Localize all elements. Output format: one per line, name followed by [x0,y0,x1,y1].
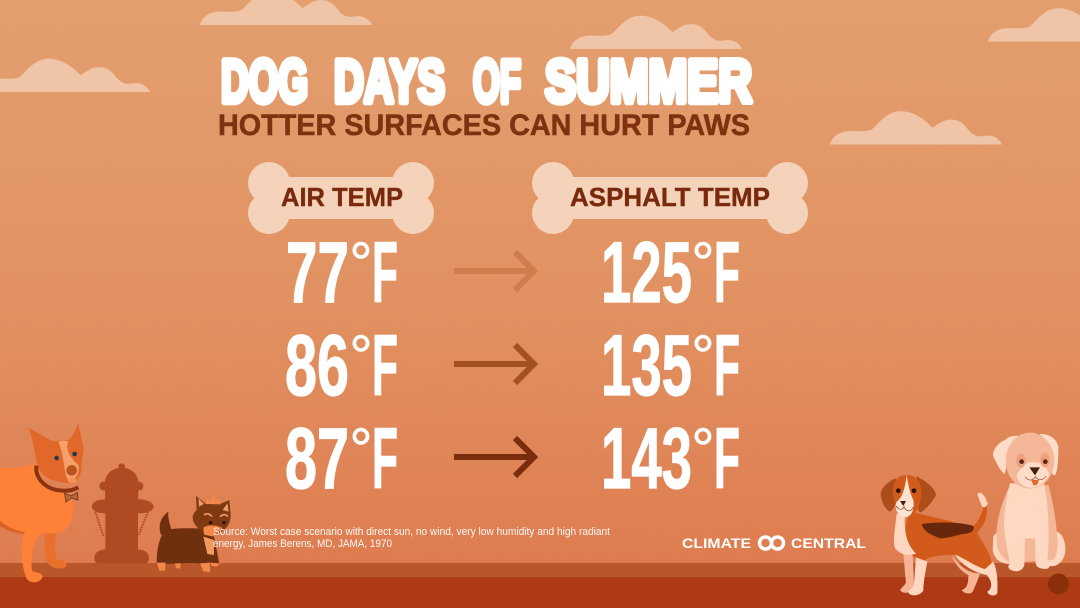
row 3: 87F to 143F: ° [349,417,373,482]
row 3: 87F to 143F: 87 [285,411,349,507]
row 1: 77F to 125F: ° [691,231,715,296]
row 1: 77F to 125F: 125 [601,225,692,321]
row 3: 87F to 143F: ° [691,417,715,482]
source note [213,526,610,550]
row 2: 86F to 135F: ° [349,324,373,389]
logo: Climate Central: CLIMATE [682,535,751,551]
bone label: air temp [248,162,434,234]
row 2: 86F to 135F: 135 [601,318,692,414]
row 3: 87F to 143F: 143 [601,411,692,507]
ground [0,563,1080,608]
title [221,48,752,115]
clouds [0,0,1080,145]
bone label: asphalt temp: ASPHALT TEMP [570,182,770,212]
illustration: sitting puppy [993,433,1065,571]
row 1: 77F to 125F: F [372,225,398,321]
row 1: 77F to 125F [286,225,740,321]
title: DAYS [334,48,445,115]
illustration: orange dog [0,423,84,582]
bone label: air temp: AIR TEMP [281,182,403,212]
row 2: 86F to 135F: F [372,318,398,414]
logo: Climate Central [682,535,866,551]
illustration: ball [1048,574,1069,594]
infographic canvas: F [714,225,740,321]
infographic canvas: F [714,318,740,414]
infographic canvas: F [714,411,740,507]
arrow: row 3 [454,438,534,476]
illustration: fire hydrant [92,463,154,563]
illustration: beagle [881,475,998,595]
source note: Source: Worst case scenario with direct sun, no wind, very low humidity and high radiant [213,526,610,538]
title: OF [473,48,521,115]
arrow: row 1 [454,252,534,290]
title: DOG [221,48,308,115]
row 1: 77F to 125F: ° [349,231,373,296]
row 3: 87F to 143F [285,411,740,507]
row 2: 86F to 135F: 86 [285,318,349,414]
arrow: row 2 [454,345,534,383]
title: SUMMER [545,48,752,115]
row 2: 86F to 135F: ° [691,324,715,389]
source note: energy, James Berens, MD, JAMA, 1970 [213,538,392,550]
subtitle: HOTTER SURFACES CAN HURT PAWS [218,109,750,142]
row 1: 77F to 125F: 77 [286,225,349,321]
bone label: asphalt temp [532,162,808,234]
row 3: 87F to 143F: F [372,411,398,507]
illustration: yorkie [157,493,231,572]
row 2: 86F to 135F [285,318,740,414]
logo: Climate Central: CENTRAL [791,535,866,551]
